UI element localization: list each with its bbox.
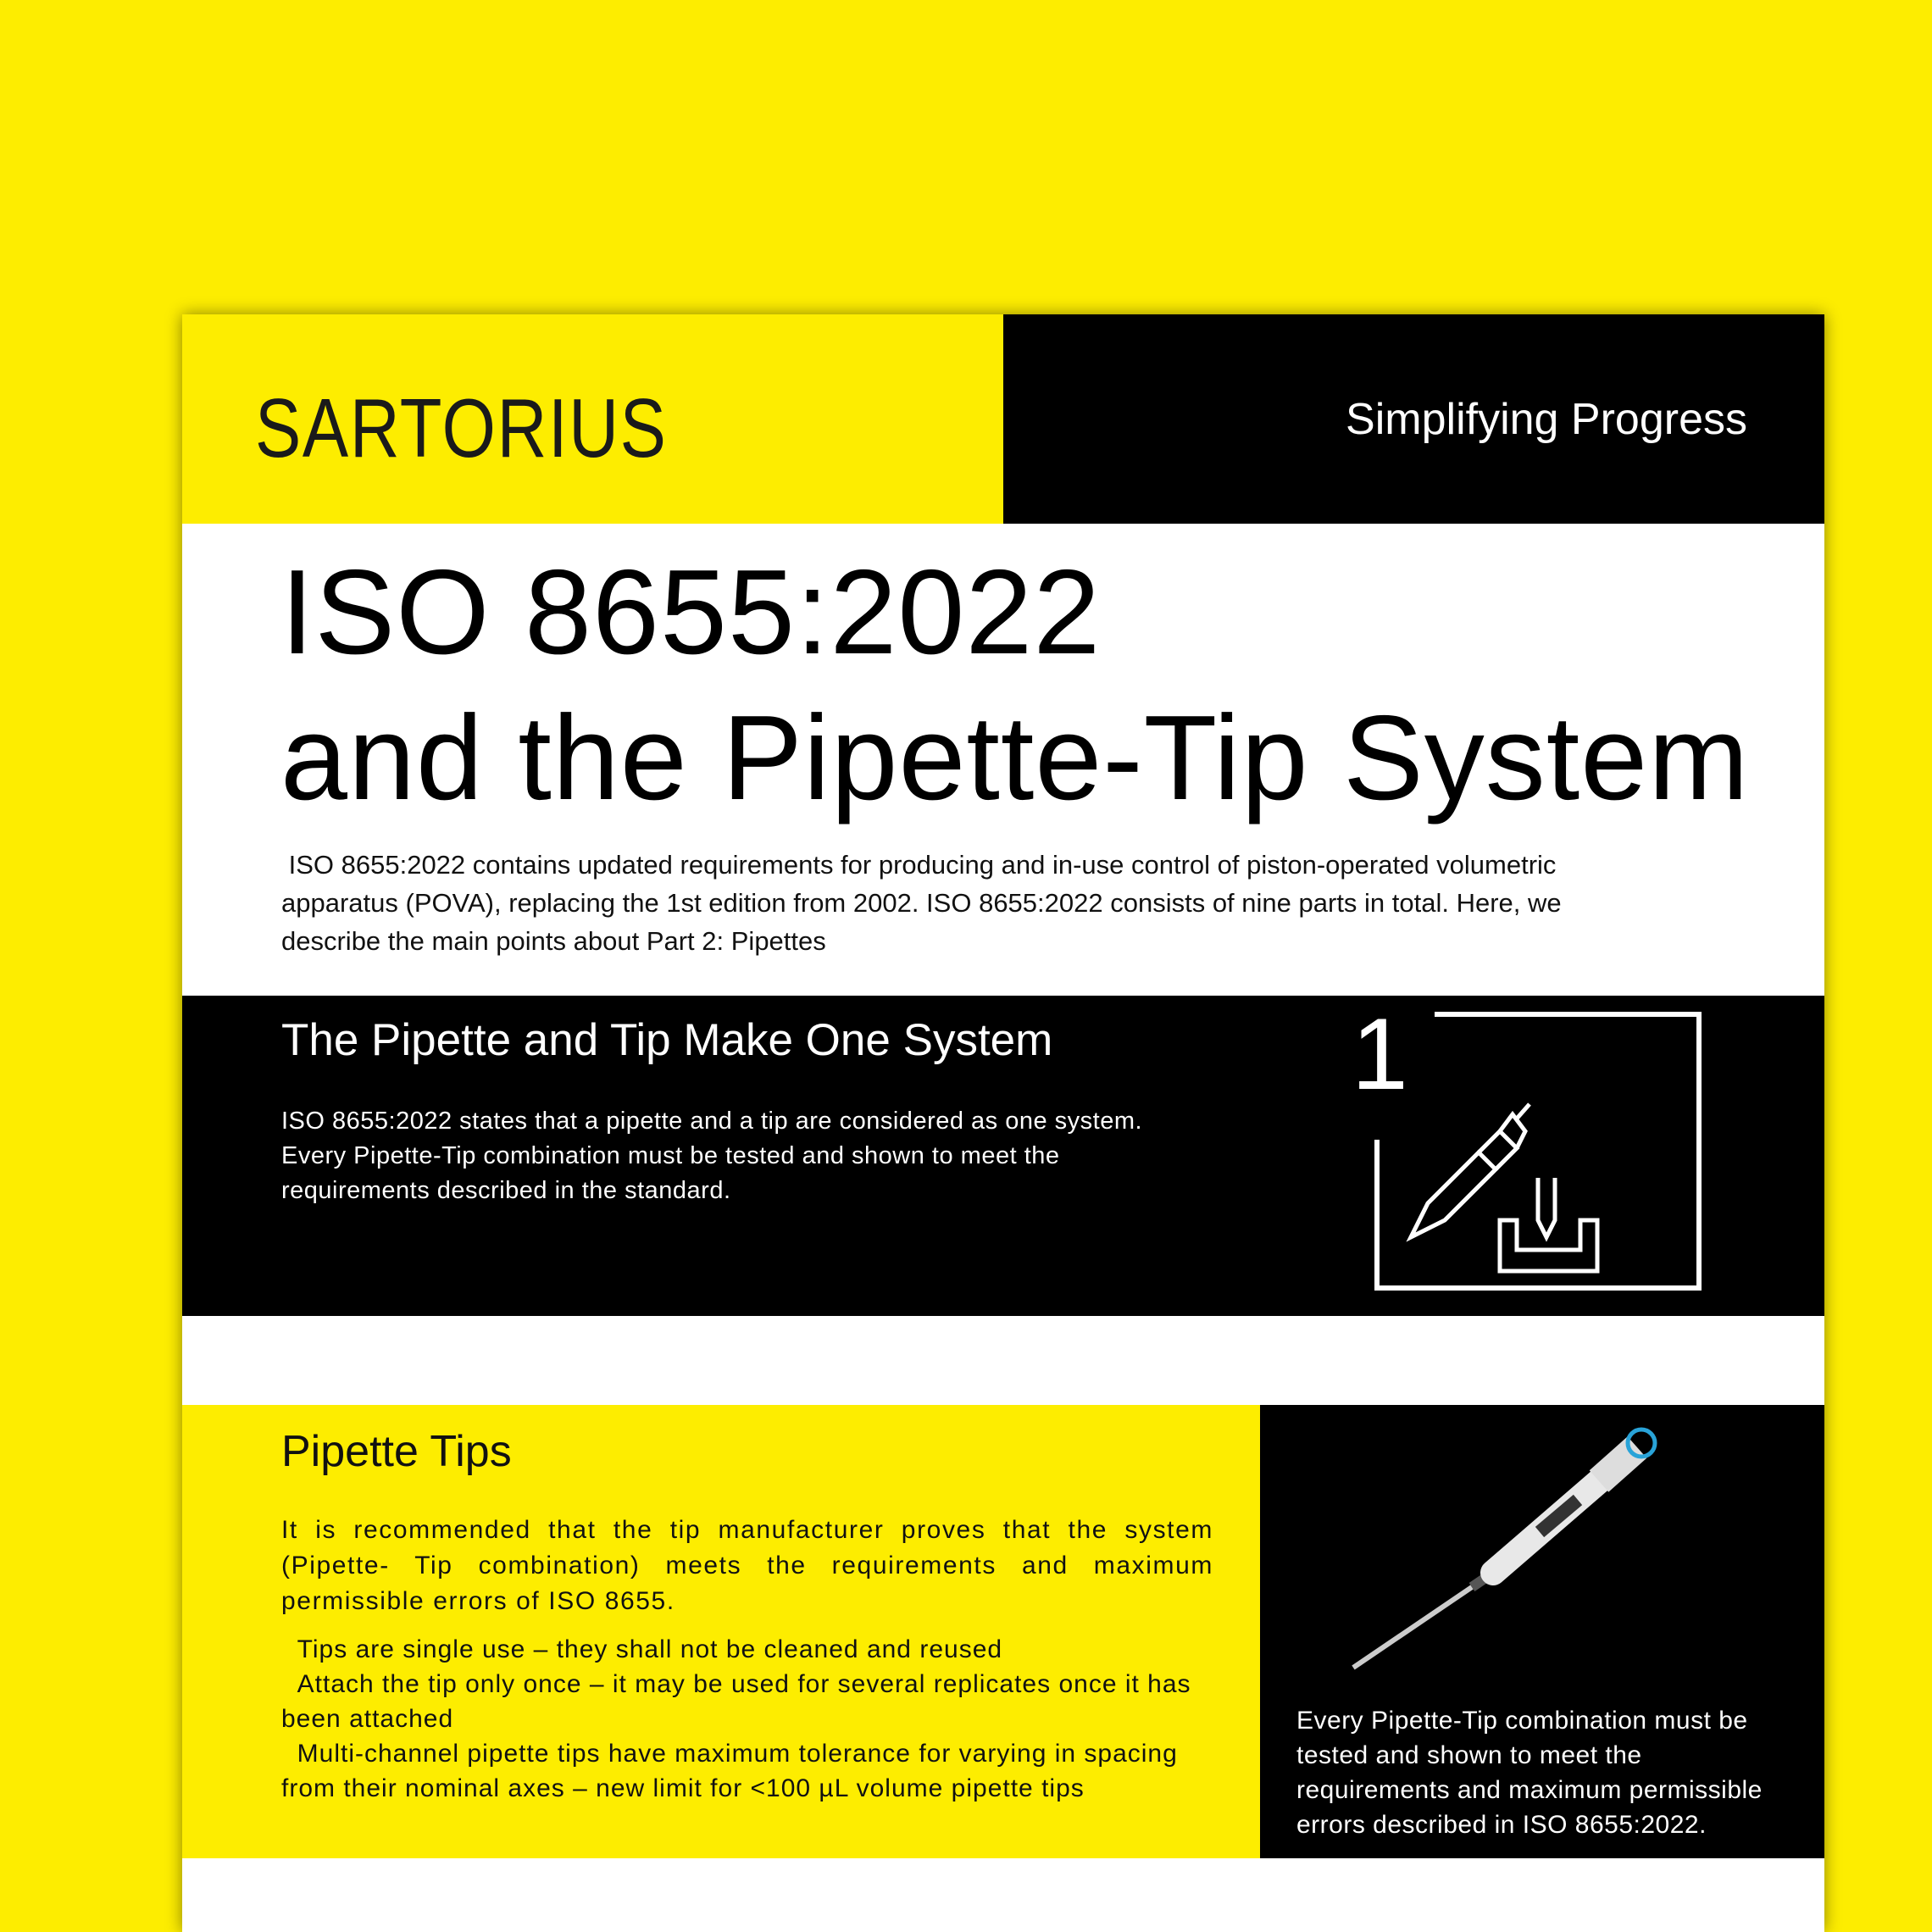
paragraph: It is recommended that the tip manufacturer proves that the system (Pipette- Tip combination) meets the requirements and maximum permissible errors of ISO 8655. <box>281 1516 1213 1615</box>
logo: SARTORIUS <box>255 381 668 475</box>
heading: Pipette Tips <box>281 1427 512 1476</box>
intro paragraph: ISO 8655:2022 contains updated requirements for producing and in-use control of piston-operated volumetric apparatus (POVA), replacing the 1st edition from 2002. ISO 8655:2022 consists of nine parts in total. Here, we describe the main points about Part 2: Pipettes <box>281 850 1562 956</box>
panel: one system <box>182 996 1824 1316</box>
panel: pipette tips <box>182 1405 1260 1858</box>
header: yellow logo area <box>182 314 1003 524</box>
panel: pipette photo <box>1260 1405 1824 1858</box>
icon: pipette into vessel <box>1352 997 1702 1291</box>
tagline: Simplifying Progress <box>1346 395 1747 444</box>
body text: ISO 8655:2022 states that a pipette and a tip are considered as one system. Every Pipette-Tip combination must be tested and shown to meet the requirements described in the standard. <box>281 1108 1142 1204</box>
card <box>182 314 1824 1932</box>
icon: pipette into vessel: 1 <box>1352 997 1408 1111</box>
title: and the Pipette-Tip System <box>280 691 1749 825</box>
caption: Every Pipette-Tip combination must be tested and shown to meet the requirements and maximum permissible errors described in ISO 8655:2022. <box>1296 1707 1763 1839</box>
bullet list: Attach the tip only once – it may be used for several replicates once it has been attached <box>281 1670 1191 1733</box>
heading: The Pipette and Tip Make One System <box>281 1015 1052 1065</box>
bullet list <box>281 1635 1191 1802</box>
title <box>280 545 1749 825</box>
bullet list: Tips are single use – they shall not be cleaned and reused <box>297 1635 1002 1663</box>
image: pipette <box>1352 1427 1657 1669</box>
bullet list: Multi-channel pipette tips have maximum tolerance for varying in spacing from their nominal axes – new limit for <100 µL volume pipette tips <box>281 1740 1178 1802</box>
header: black tagline area <box>1003 314 1824 524</box>
title: ISO 8655:2022 <box>280 545 1101 680</box>
